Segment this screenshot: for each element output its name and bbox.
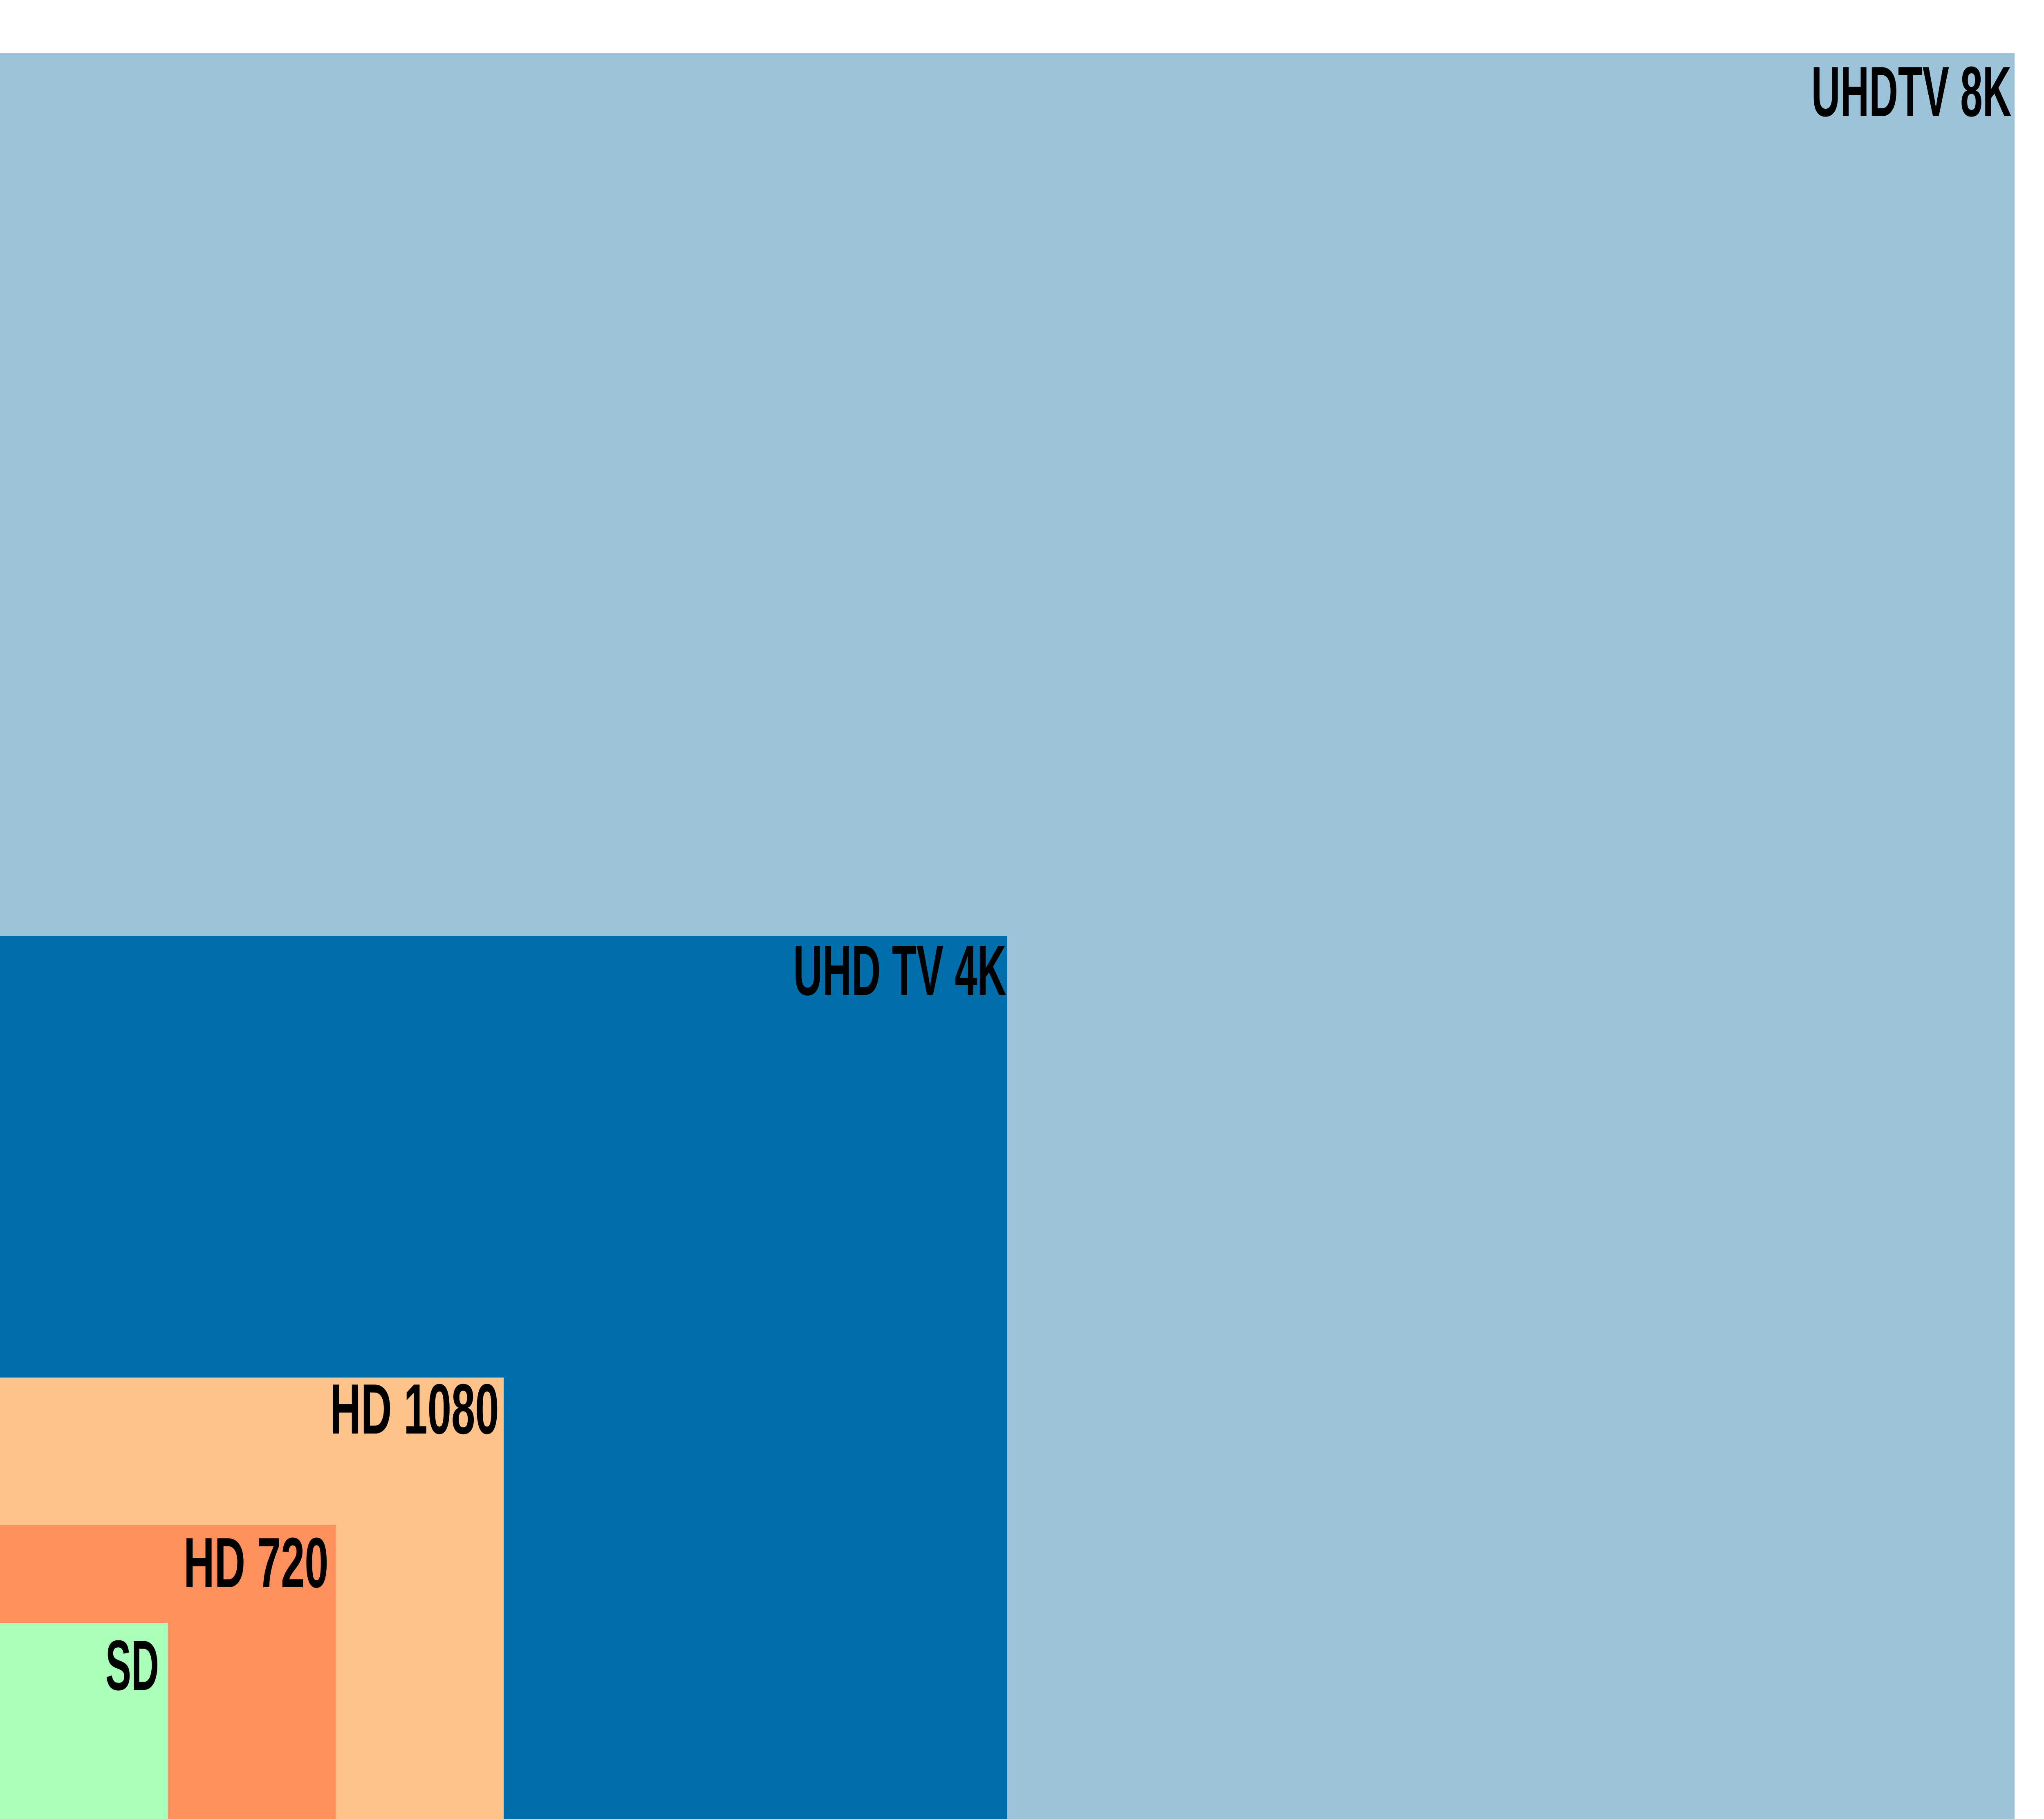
label: HD 720: HD 720 — [184, 1523, 328, 1602]
panel: UHD TV 4K — [0, 931, 1007, 1819]
panel: HD 720 — [0, 1523, 336, 1819]
label: UHDTV 8K: UHDTV 8K — [1811, 52, 2011, 131]
label: SD: SD — [105, 1626, 159, 1705]
panel: HD 1080 — [0, 1369, 504, 1819]
label: HD 1080: HD 1080 — [330, 1369, 499, 1449]
panel: SD — [0, 1623, 168, 1819]
label: UHD TV 4K: UHD TV 4K — [793, 931, 1006, 1010]
